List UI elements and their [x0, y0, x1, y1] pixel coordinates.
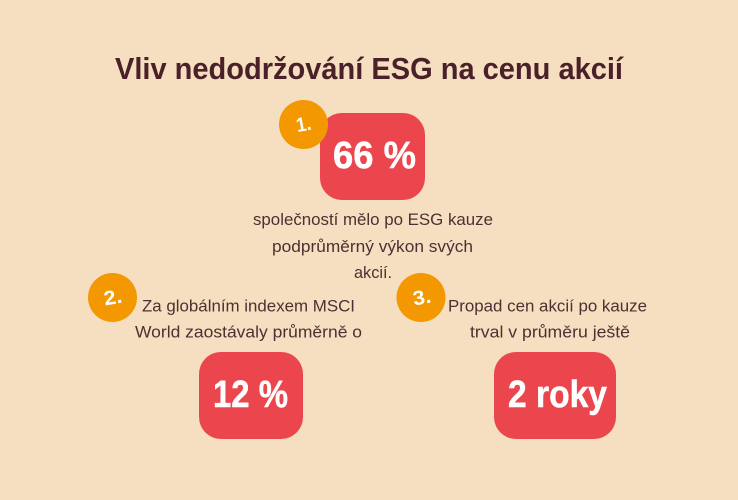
panel: statistic 1: [253, 100, 493, 282]
value box: 66 %: [320, 113, 425, 200]
text block: statistic 2 description: World zaostávaly průměrně o: [135, 322, 362, 342]
text block: statistic 1 description: akcií.: [354, 263, 392, 282]
text block: statistic 2 description: Za globálním indexem MSCI: [142, 296, 355, 316]
text block: statistic 3 description: trval v průměru ještě: [470, 322, 630, 342]
text block: statistic 2 description: [135, 296, 362, 342]
value box: 2 roky: [494, 352, 616, 439]
text block: statistic 1 description: [253, 210, 493, 282]
text block: statistic 1 description: podprůměrný výkon svých: [272, 237, 473, 256]
number badge 1: [279, 100, 328, 149]
value box: 12 %: 12 %: [213, 374, 288, 416]
number badge 3: 3.: [411, 286, 433, 310]
title: Vliv nedodržování ESG na cenu akcií: [115, 51, 624, 86]
number badge 1: 1.: [294, 113, 313, 137]
text block: statistic 1 description: společností mělo po ESG kauze: [253, 210, 493, 229]
value box: 66 %: 66 %: [333, 135, 416, 177]
value box: 12 %: [199, 352, 303, 439]
number badge 3: [396, 273, 446, 322]
text block: statistic 3 description: Propad cen akcií po kauze: [448, 296, 647, 316]
text block: statistic 3 description: [448, 296, 647, 342]
value box: 2 roky: 2 roky: [508, 374, 607, 416]
panel: statistic 2: [88, 273, 362, 439]
number badge 2: 2.: [102, 286, 124, 310]
panel: statistic 3: [396, 273, 647, 439]
number badge 2: [88, 273, 137, 322]
